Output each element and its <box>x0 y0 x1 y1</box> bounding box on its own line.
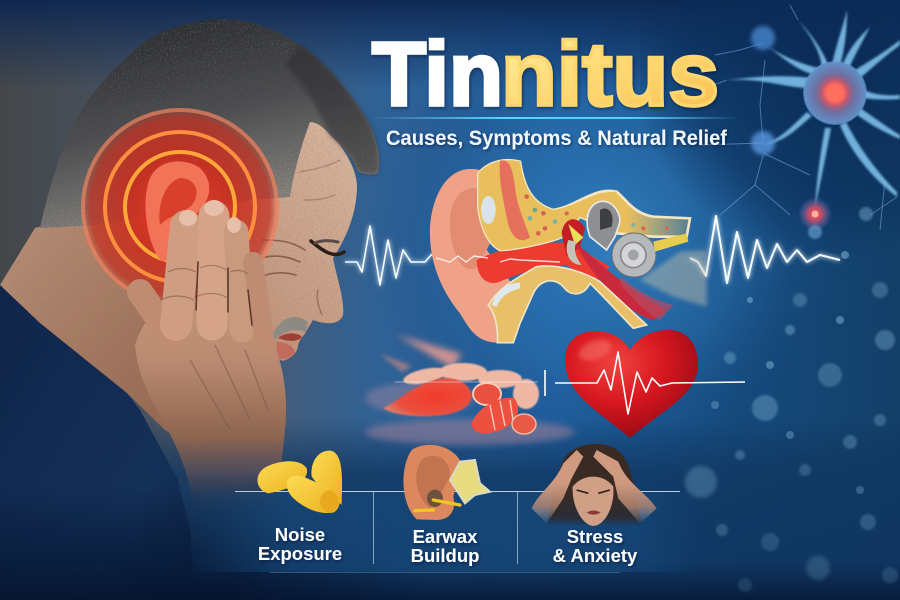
title: Tin: Tin <box>372 25 503 125</box>
fingernails <box>179 200 241 233</box>
man illustration <box>0 20 420 600</box>
bokeh particles <box>685 207 898 592</box>
face <box>573 477 614 526</box>
nerve bundles <box>577 243 667 320</box>
thin dendrites <box>700 5 897 230</box>
skin with texture <box>0 118 357 450</box>
beige tissue right <box>640 250 707 307</box>
subtitle: Causes, Symptoms & Natural Relief <box>386 127 728 150</box>
shirt and wrist shadow <box>0 508 370 600</box>
sound wave right <box>690 216 840 283</box>
face <box>150 118 357 361</box>
label: Earwax Buildup: Earwax <box>413 526 478 547</box>
label: Stress & Anxiety: Stress <box>567 526 623 547</box>
neck <box>0 200 240 450</box>
hair with texture <box>40 20 379 228</box>
outer ear <box>430 169 517 343</box>
neuron network <box>700 5 900 239</box>
inner ear sound wave <box>436 256 560 262</box>
inflamed tissue <box>365 335 575 445</box>
dark hair band <box>285 45 379 174</box>
panel: causes <box>190 444 700 573</box>
ground <box>365 419 575 445</box>
coils <box>473 383 501 405</box>
upper bone <box>478 160 690 250</box>
ear <box>145 161 209 262</box>
title <box>372 25 719 125</box>
title: nitus: nitus <box>501 25 719 125</box>
hand <box>135 200 286 515</box>
pale lobes <box>402 363 539 409</box>
blood vessel <box>500 160 530 240</box>
bone dots <box>524 194 668 236</box>
ear anatomy diagram <box>430 160 707 343</box>
wrinkles and eye <box>262 160 344 315</box>
hair <box>40 20 379 228</box>
icon: stressed woman <box>532 444 657 526</box>
eardrum area <box>562 219 585 257</box>
label: Noise Exposure: Noise <box>275 524 325 545</box>
lower bone <box>488 266 647 343</box>
icon: earplugs <box>257 451 342 513</box>
cartilage <box>481 196 496 224</box>
ear pain rings <box>80 107 280 307</box>
shirt <box>0 285 195 600</box>
sound wave left <box>345 226 432 285</box>
main red mass <box>383 378 472 416</box>
blue nodes <box>751 26 775 50</box>
fingers <box>176 216 265 345</box>
ear canal <box>477 243 610 283</box>
neuron body <box>803 61 867 125</box>
red node <box>798 197 832 231</box>
auditory nerve <box>653 233 688 252</box>
label: Stress & Anxiety: & Anxiety <box>553 545 638 566</box>
icon: earwax <box>403 445 490 520</box>
panel background <box>190 491 700 572</box>
label: Noise Exposure: Exposure <box>258 543 342 564</box>
hair <box>547 444 642 525</box>
ossicle and cochlea <box>587 201 620 250</box>
light streaks <box>397 335 462 368</box>
heart with ECG <box>395 330 745 438</box>
title divider line <box>370 117 740 119</box>
beard and mouth <box>272 317 308 359</box>
thick dendrites <box>727 10 900 208</box>
arms <box>532 450 583 523</box>
knuckles <box>160 265 268 430</box>
label: Earwax Buildup: Buildup <box>411 545 479 566</box>
thumb <box>140 292 172 338</box>
palm and wrist <box>135 298 286 515</box>
